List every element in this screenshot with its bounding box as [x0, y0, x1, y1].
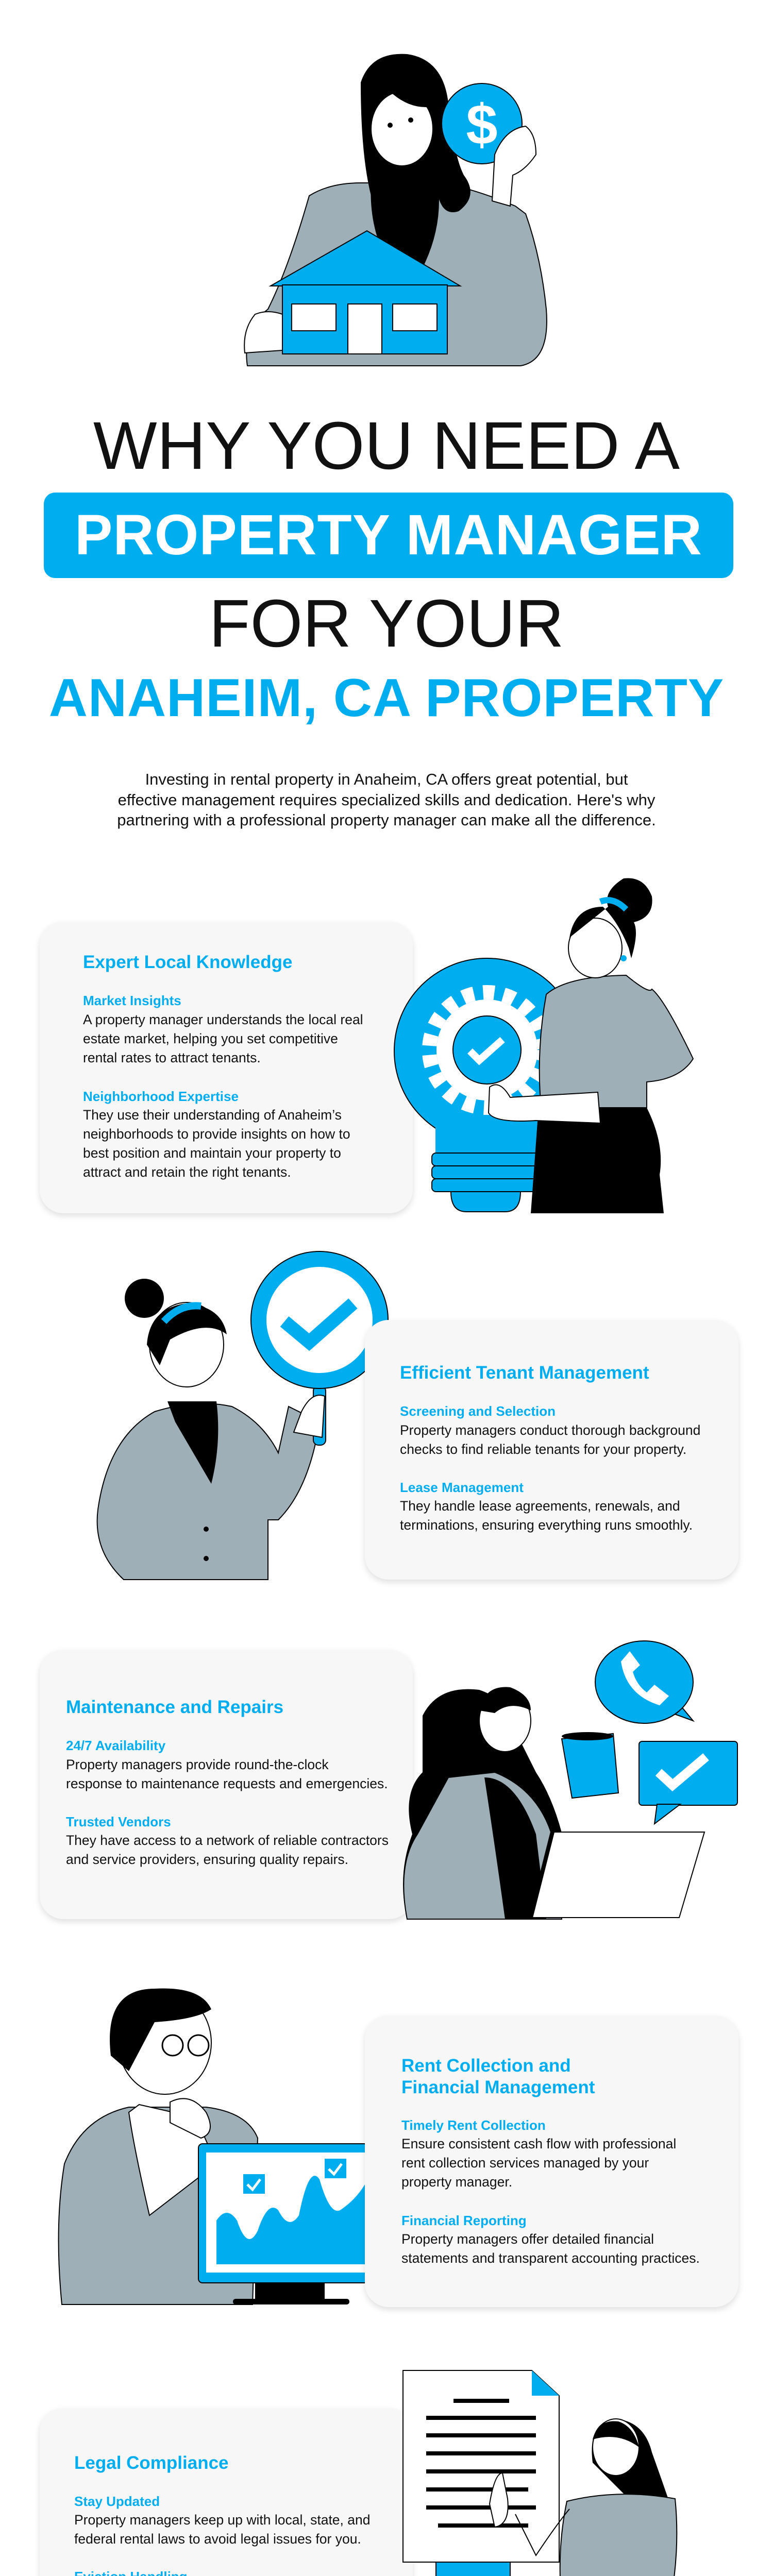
- heading: Rent Collection and: [401, 2056, 571, 2076]
- hand: [492, 126, 536, 206]
- panel: rent collection: [365, 2015, 738, 2307]
- icon: lightbulb with gear and woman: [394, 878, 694, 1213]
- title line 1: WHY YOU NEED A: [93, 408, 680, 483]
- intro text: [117, 770, 656, 829]
- heading: Expert Local Knowledge: [83, 952, 292, 972]
- heading: Financial Management: [401, 2077, 595, 2097]
- body: [66, 1833, 389, 1867]
- title line 4: ANAHEIM, CA PROPERTY: [49, 668, 724, 728]
- body: federal rental laws to avoid legal issues for you.: [74, 2531, 361, 2547]
- body: They have access to a network of reliable contractors: [66, 1833, 389, 1848]
- icon: document with woman: [402, 2370, 677, 2576]
- body: property manager.: [401, 2174, 512, 2190]
- sub: Timely Rent Collection: [401, 2117, 546, 2133]
- black top: [371, 183, 439, 268]
- house: [271, 231, 460, 286]
- icon: woman with magnifier check: [97, 1251, 389, 1580]
- title line 3: FOR YOUR: [209, 585, 564, 661]
- heading: Maintenance and Repairs: [66, 1697, 283, 1717]
- body: [74, 2512, 370, 2547]
- panel: legal compliance: [40, 2408, 413, 2576]
- title highlight box: PROPERTY MANAGER: [75, 503, 702, 567]
- body: A property manager understands the local real: [83, 1012, 363, 1027]
- sub: Stay Updated: [74, 2494, 160, 2509]
- intro text: partnering with a professional property manager can make all the difference.: [117, 811, 656, 829]
- panel: maintenance and repairs: [40, 1650, 413, 1919]
- body: attract and retain the right tenants.: [83, 1164, 291, 1180]
- sub: market insights: Market Insights: [83, 993, 181, 1008]
- body: Property managers keep up with local, state, and: [74, 2512, 370, 2528]
- sub: Financial Reporting: [401, 2213, 527, 2228]
- heading: Legal Compliance: [74, 2453, 229, 2473]
- sub: neighborhood: Neighborhood Expertise: [83, 1089, 239, 1104]
- intro text: Investing in rental property in Anaheim, CA offers great potential, but: [145, 770, 628, 788]
- body: checks to find reliable tenants for your property.: [400, 1442, 686, 1457]
- body: Property managers provide round-the-clock: [66, 1757, 329, 1772]
- body: [83, 1107, 350, 1180]
- gray jacket: [246, 183, 547, 366]
- body: [401, 2136, 676, 2190]
- body: Property managers offer detailed financial: [401, 2231, 654, 2247]
- heading: [401, 2056, 595, 2097]
- panel: expert local knowledge: [40, 922, 413, 1213]
- body: [83, 1012, 363, 1065]
- body: response to maintenance requests and emergencies.: [66, 1776, 388, 1791]
- face: [371, 92, 433, 166]
- body: Ensure consistent cash flow with professional: [401, 2136, 676, 2151]
- body: and service providers, ensuring quality repairs.: [66, 1852, 348, 1867]
- body: neighborhoods to provide insights on how to: [83, 1126, 350, 1142]
- body: best position and maintain your property to: [83, 1145, 341, 1161]
- body: [401, 2231, 700, 2266]
- intro text: effective management requires specialized skills and dedication. Here's why: [118, 790, 655, 809]
- sub: Trusted Vendors: [66, 1814, 171, 1829]
- title highlight box: [44, 493, 733, 578]
- sub: 24/7 Availability: [66, 1738, 165, 1753]
- icon: man thinking with chart monitor: [58, 1989, 365, 2305]
- body: rental rates to attract tenants.: [83, 1050, 261, 1065]
- body: They handle lease agreements, renewals, and: [400, 1498, 680, 1514]
- body: rent collection services managed by your: [401, 2155, 649, 2171]
- body: [66, 1757, 388, 1791]
- panel: efficient tenant management: [365, 1320, 738, 1580]
- hair: [361, 54, 470, 212]
- body: [400, 1422, 700, 1457]
- body: terminations, ensuring everything runs smoothly.: [400, 1517, 693, 1533]
- body: [400, 1498, 693, 1533]
- sub: Screening and Selection: [400, 1403, 556, 1419]
- body: They use their understanding of Anaheim’s: [83, 1107, 342, 1123]
- body: estate market, helping you set competitive: [83, 1031, 338, 1046]
- coin: [442, 83, 522, 164]
- icon: woman with laptop, mug, phone and chat: [403, 1640, 738, 1920]
- body: Property managers conduct thorough background: [400, 1422, 700, 1438]
- body: statements and transparent accounting practices.: [401, 2250, 700, 2266]
- hero illustration: woman with house and coin: [244, 54, 547, 366]
- heading: Efficient Tenant Management: [400, 1363, 649, 1383]
- sub: Lease Management: [400, 1480, 524, 1495]
- title: [44, 408, 733, 728]
- hero illustration: woman with house and coin: $: [466, 93, 498, 157]
